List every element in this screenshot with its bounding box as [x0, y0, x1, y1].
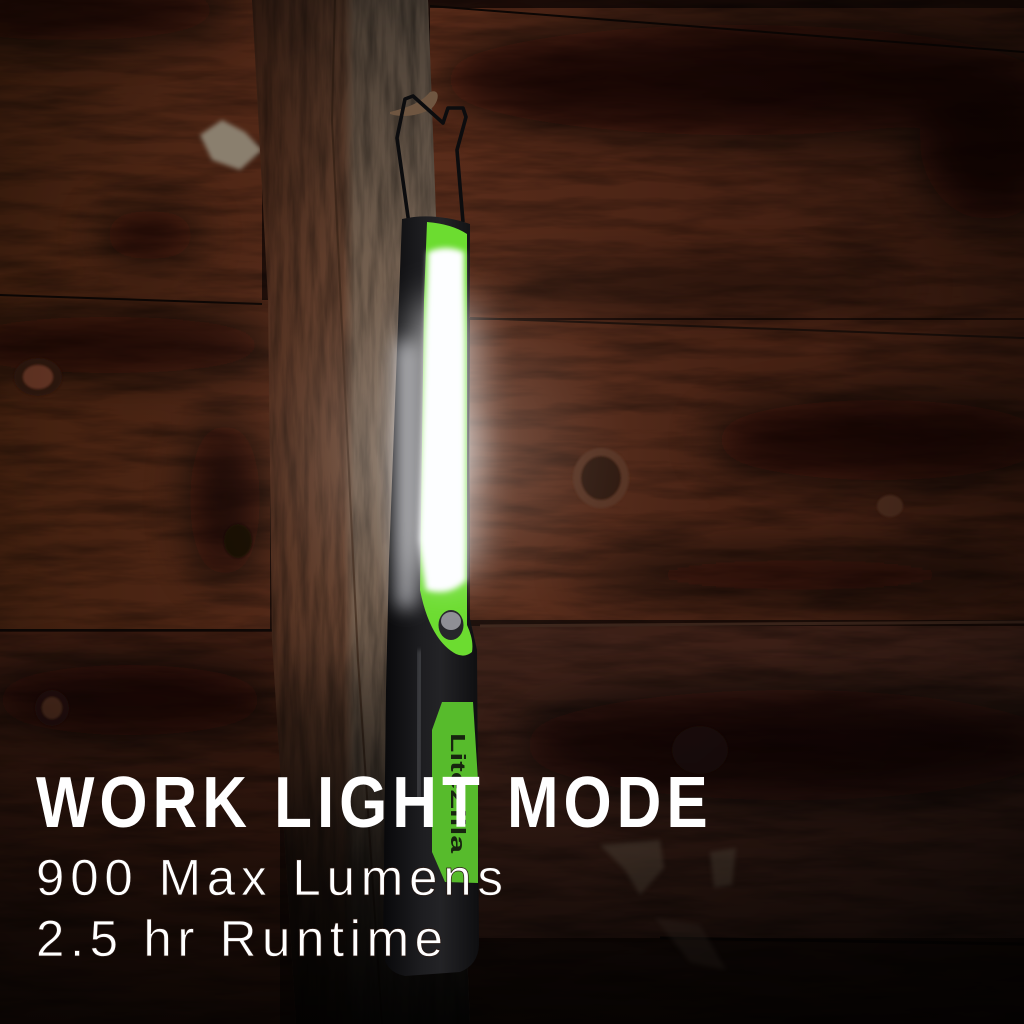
twine on post: [390, 91, 438, 116]
glare on housing: [396, 340, 416, 610]
right planks: [430, 8, 1024, 1024]
trigger button: [438, 610, 464, 640]
LED glow strip: [419, 248, 466, 592]
dark wood patches: [0, 0, 1024, 800]
heading: WORK LIGHT MODE: [36, 763, 708, 843]
post grain: [252, 0, 436, 868]
left planks: [0, 0, 280, 1024]
bottom darkening behind text: [0, 640, 1024, 1024]
green grip label: LiteZilla: [446, 733, 468, 854]
green grip label: [432, 702, 478, 883]
spec: runtime: 2.5 hr Runtime: [36, 910, 443, 967]
wood knots: [14, 358, 903, 774]
work light product: [383, 216, 479, 976]
wooden post: [252, 0, 436, 922]
handle highlight: [418, 650, 420, 800]
spec: lumens: 900 Max Lumens: [36, 849, 503, 906]
heading and specs: [36, 763, 708, 967]
lamp housing: [383, 216, 479, 976]
icon: wire hanger hook: [397, 96, 466, 224]
light patches on wood: [200, 120, 262, 170]
green lens panel: [420, 222, 472, 656]
soft halo: [412, 300, 476, 580]
